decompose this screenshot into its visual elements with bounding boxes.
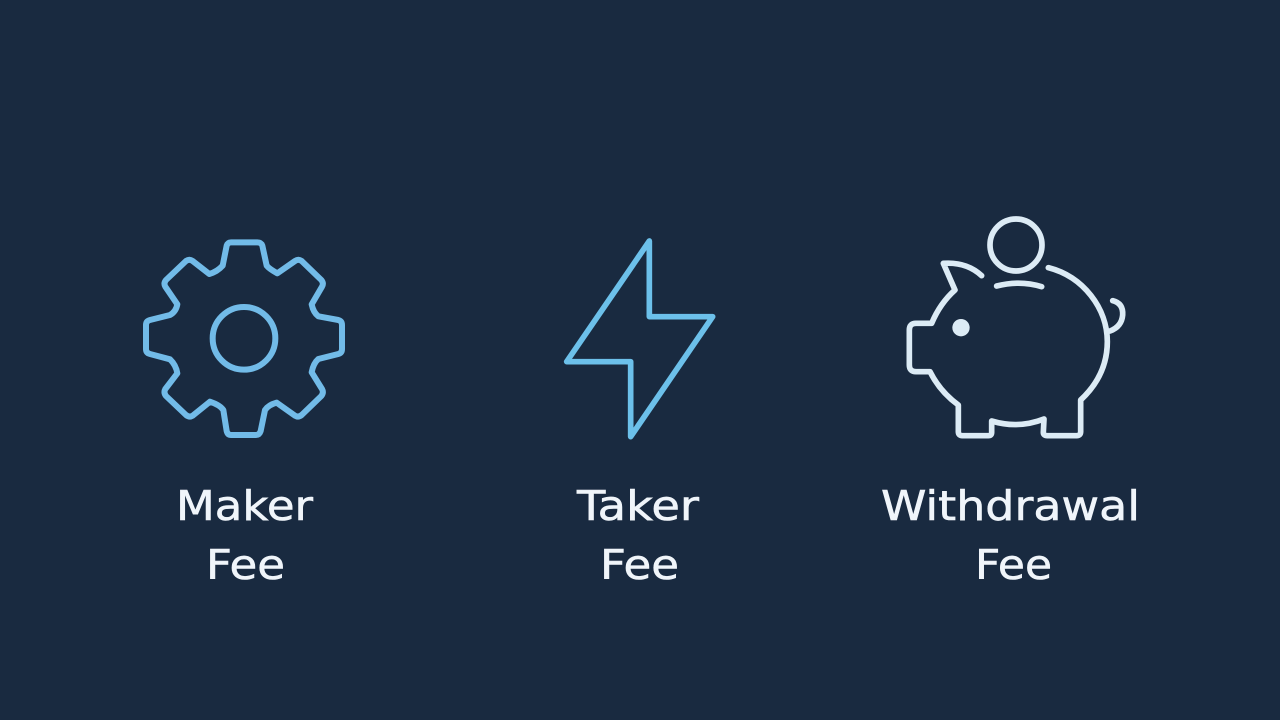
label: Maker Fee: Fee	[206, 541, 285, 589]
label: Maker Fee	[176, 482, 313, 589]
label: Maker Fee: Maker	[176, 482, 313, 530]
label: Taker Fee	[576, 482, 699, 589]
label: Taker Fee: Taker	[576, 482, 699, 530]
panel: withdrawal fee	[881, 219, 1140, 589]
label: Withdrawal Fee	[881, 482, 1140, 589]
label: Taker Fee: Fee	[600, 541, 679, 589]
label: Withdrawal Fee: Fee	[975, 541, 1052, 589]
icon: gear	[146, 242, 342, 435]
panel: maker fee	[146, 242, 342, 589]
icon: piggy bank with coin	[909, 219, 1123, 436]
label: Withdrawal Fee: Withdrawal	[881, 482, 1140, 530]
icon: lightning bolt	[567, 241, 713, 437]
panel: taker fee	[567, 241, 713, 589]
